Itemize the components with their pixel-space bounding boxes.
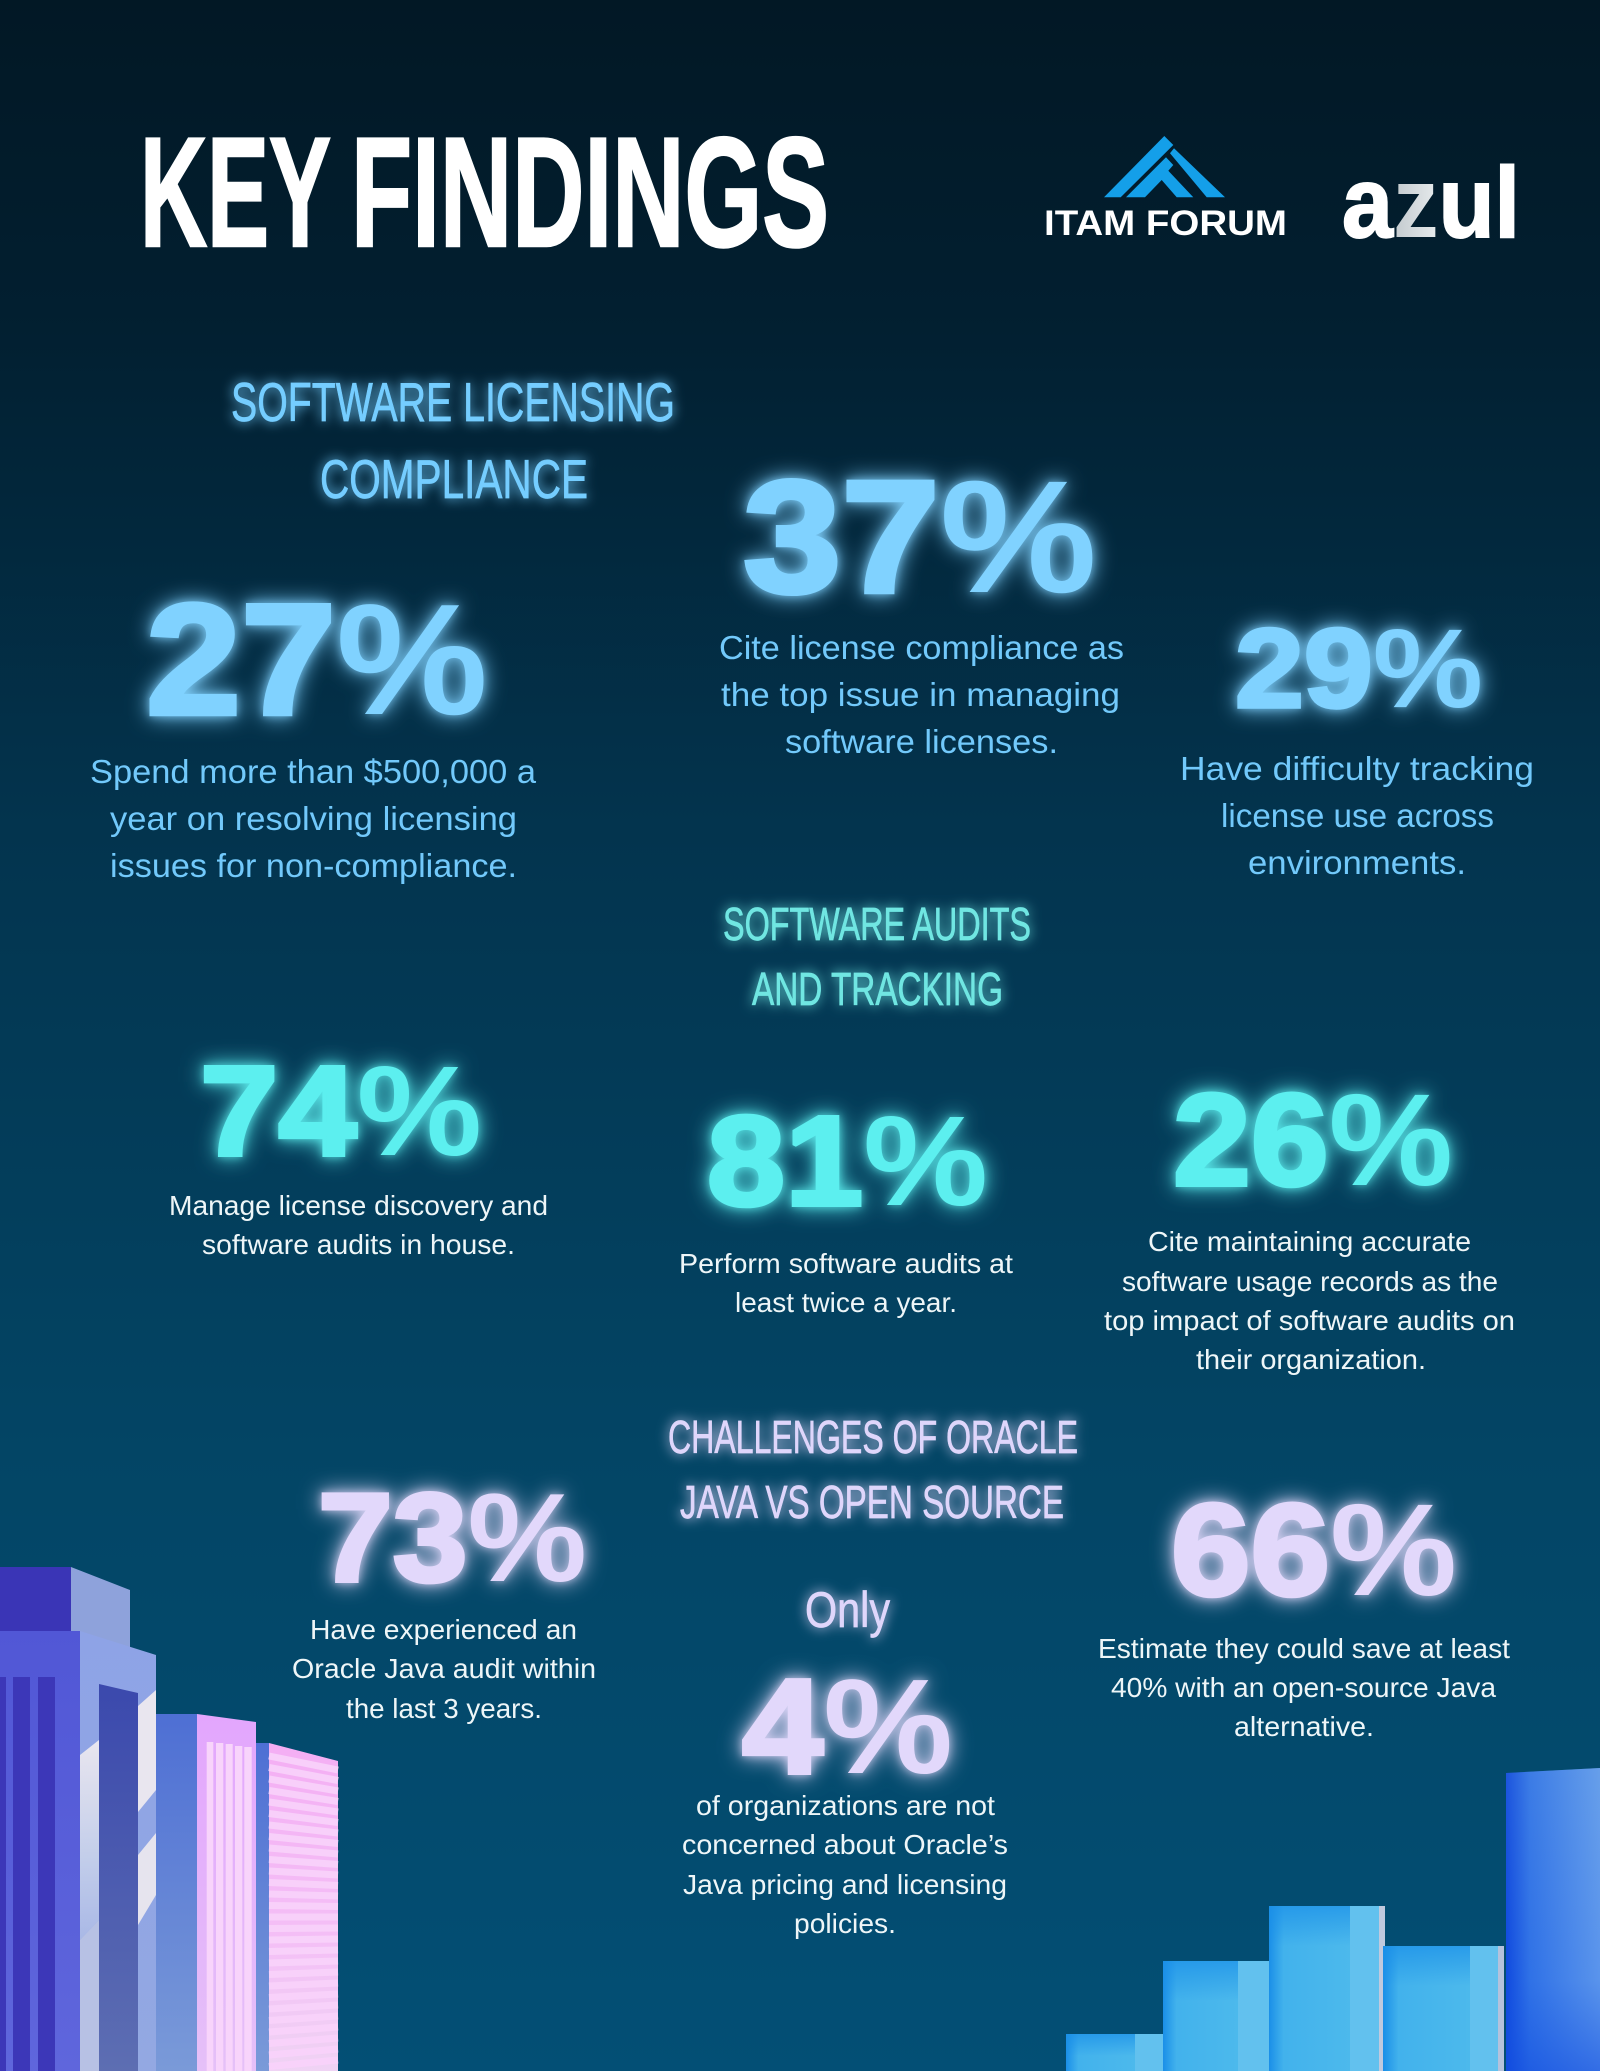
description: concerned about Oracle’s xyxy=(682,1829,1008,1860)
description: Java pricing and licensing xyxy=(683,1869,1007,1900)
description xyxy=(1098,1633,1510,1742)
description: Spend more than $500,000 a xyxy=(90,753,537,790)
description: software usage records as the xyxy=(1122,1266,1498,1297)
bar 5 xyxy=(1506,1768,1600,2071)
stat: 66% xyxy=(1098,1476,1510,1742)
logo: azul: azul xyxy=(1342,147,1520,259)
bar 1 xyxy=(1066,2034,1163,2071)
description: year on resolving licensing xyxy=(110,800,517,837)
description xyxy=(682,1790,1008,1939)
heading: software licensing compliance: SOFTWARE LICENSING xyxy=(231,371,675,433)
white diagonal reflections xyxy=(80,1740,99,1940)
stat: 37% xyxy=(719,447,1124,760)
description: policies. xyxy=(794,1908,896,1939)
stat: 27% xyxy=(90,572,537,884)
description: least twice a year. xyxy=(735,1287,957,1318)
description: license use across xyxy=(1221,797,1494,834)
description: software licenses. xyxy=(785,723,1058,760)
stat: 73% xyxy=(292,1467,596,1724)
title xyxy=(140,106,829,280)
description: Oracle Java audit within xyxy=(292,1653,596,1684)
tower windows xyxy=(0,1677,6,2071)
description xyxy=(719,629,1124,760)
bar 4 xyxy=(1383,1946,1504,2071)
description: Estimate they could save at least xyxy=(1098,1633,1510,1664)
heading: software audits and tracking xyxy=(723,898,1031,1015)
description: Have difficulty tracking xyxy=(1180,750,1534,787)
second building xyxy=(156,1714,197,2071)
description: Manage license discovery and xyxy=(169,1190,548,1221)
title: KEY xyxy=(140,106,331,280)
description: the last 3 years. xyxy=(346,1693,542,1724)
illustration: blue bars right xyxy=(1066,1768,1600,2071)
description: the top issue in managing xyxy=(721,676,1120,713)
main tower xyxy=(0,1631,80,2071)
number 26%: 26% xyxy=(1173,1066,1453,1213)
title: FINDINGS xyxy=(351,106,829,280)
third building xyxy=(256,1743,269,2071)
description: Perform software audits at xyxy=(679,1248,1013,1279)
heading: challenges of Oracle Java vs open source: JAVA VS OPEN SOURCE xyxy=(680,1476,1064,1528)
description: Cite maintaining accurate xyxy=(1148,1226,1471,1257)
number 37%: 37% xyxy=(743,447,1097,626)
stat: 74% xyxy=(169,1040,548,1260)
number 81%: 81% xyxy=(707,1090,988,1233)
description: issues for non-compliance. xyxy=(110,847,517,884)
heading: software licensing compliance: COMPLIANCE xyxy=(320,448,588,510)
number 27%: 27% xyxy=(146,572,488,748)
description: Have experienced an xyxy=(310,1614,577,1645)
illustration: purple buildings left xyxy=(0,1567,338,2071)
description: alternative. xyxy=(1234,1711,1374,1742)
bar 2 xyxy=(1163,1961,1269,2071)
bar 3 xyxy=(1269,1906,1385,2071)
number 29%: 29% xyxy=(1235,606,1483,731)
stat: 29% xyxy=(1180,606,1534,881)
description xyxy=(292,1614,596,1724)
description: Cite license compliance as xyxy=(719,629,1124,666)
description: their organization. xyxy=(1196,1344,1426,1375)
description: software audits in house. xyxy=(202,1229,515,1260)
logo: ITAM Forum xyxy=(1044,136,1287,243)
ITAM Forum wordmark: ITAM FORUM xyxy=(1044,204,1287,243)
heading: challenges of Oracle Java vs open source xyxy=(668,1411,1078,1528)
description xyxy=(679,1248,1013,1318)
number 73%: 73% xyxy=(318,1467,587,1608)
stat: 81% xyxy=(679,1090,1013,1318)
heading: software audits and tracking: SOFTWARE AUDITS xyxy=(723,898,1031,950)
description xyxy=(169,1190,548,1260)
icon: ITAM Forum roof mark xyxy=(1104,136,1225,197)
description: 40% with an open-source Java xyxy=(1111,1672,1496,1703)
number 4%: 4% xyxy=(742,1651,953,1802)
description: of organizations are not xyxy=(696,1790,995,1821)
stat: only 4% xyxy=(682,1582,1008,1939)
number 66%: 66% xyxy=(1171,1476,1457,1623)
number 74%: 74% xyxy=(200,1040,482,1183)
heading: software licensing compliance xyxy=(231,371,675,510)
description xyxy=(90,753,537,884)
rear tower top xyxy=(0,1567,71,1631)
label: only: Only xyxy=(805,1582,890,1638)
description xyxy=(1180,750,1534,881)
description xyxy=(1104,1226,1515,1375)
stat: 26% xyxy=(1104,1066,1515,1375)
heading: challenges of Oracle Java vs open source: CHALLENGES OF ORACLE xyxy=(668,1411,1078,1463)
description: environments. xyxy=(1248,844,1466,881)
description: top impact of software audits on xyxy=(1104,1305,1515,1336)
heading: software audits and tracking: AND TRACKING xyxy=(752,963,1003,1015)
